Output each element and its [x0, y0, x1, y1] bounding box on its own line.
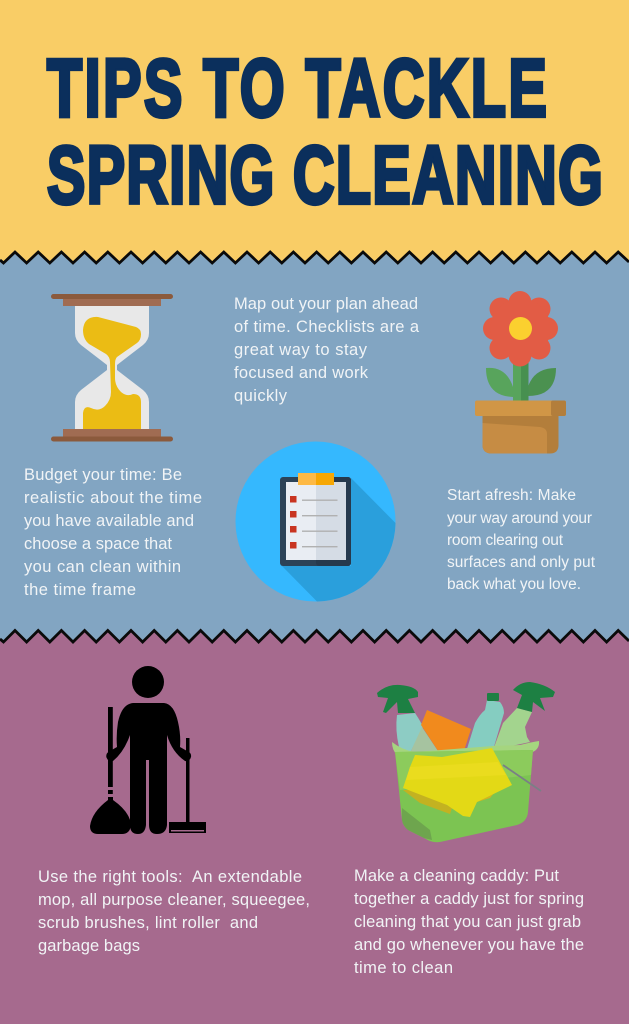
text: start afresh: surfaces and only put [447, 554, 596, 571]
text: start afresh: room clearing out [447, 532, 564, 549]
text: use the right tools: garbage bags [38, 937, 140, 955]
text: map out your plan: of time. Checklists are a [234, 318, 420, 336]
icon: cleaning caddy bucket [377, 682, 555, 842]
text: map out your plan: quickly [234, 387, 288, 405]
panel: purple bottom section [0, 630, 629, 1024]
text: make a cleaning caddy [354, 867, 584, 977]
text: budget your time: you can clean within [24, 558, 181, 576]
text: start afresh: back what you love. [447, 576, 581, 593]
icon: hourglass [51, 294, 173, 442]
text: make a cleaning caddy: and go whenever you have the [354, 936, 584, 954]
text: use the right tools: scrub brushes, lint roller and [38, 914, 258, 932]
title: SPRING CLEANING [47, 129, 603, 220]
divider: top zigzag [0, 252, 629, 263]
text: start afresh [447, 487, 596, 593]
text: budget your time: realistic about the time [24, 489, 202, 507]
text: budget your time [24, 466, 202, 599]
text: budget your time: choose a space that [24, 535, 172, 553]
icon: flower in pot [475, 291, 566, 454]
title: TIPS TO TACKLE [47, 42, 547, 133]
text: use the right tools: mop, all purpose cleaner, squeegee, [38, 891, 310, 909]
text: make a cleaning caddy: cleaning that you can just grab [354, 913, 581, 931]
icon: person with mop and broom [90, 666, 206, 834]
text: start afresh: your way around your [447, 510, 592, 527]
text: budget your time: you have available and [24, 512, 194, 530]
text: use the right tools [38, 868, 310, 955]
text: budget your time: the time frame [24, 581, 136, 599]
text: map out your plan: focused and work [234, 364, 369, 382]
text: use the right tools: Use the right tools: An extendable [38, 868, 302, 886]
text: map out your plan: Map out your plan ahead [234, 295, 418, 313]
text: map out your plan [234, 295, 420, 405]
text: budget your time: Budget your time: Be [24, 466, 182, 484]
panel: yellow header section [0, 0, 629, 263]
title [47, 42, 603, 220]
text: start afresh: Start afresh: Make [447, 487, 576, 504]
text: map out your plan: great way to stay [234, 341, 368, 359]
text: make a cleaning caddy: together a caddy just for spring [354, 890, 584, 908]
text: make a cleaning caddy: time to clean [354, 959, 453, 977]
text: make a cleaning caddy: Make a cleaning caddy: Put [354, 867, 559, 885]
icon: clipboard in blue circle [236, 442, 396, 602]
panel: blue middle section [0, 240, 629, 645]
divider: lower zigzag [0, 630, 629, 642]
